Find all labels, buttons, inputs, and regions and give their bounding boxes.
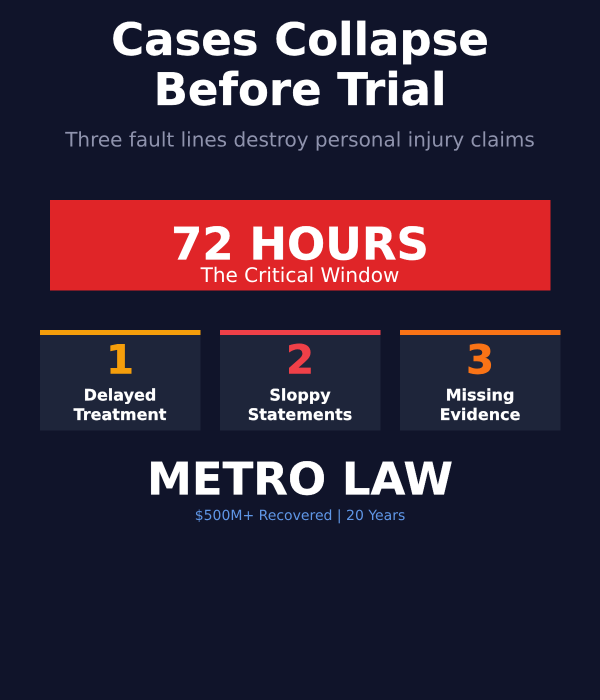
firm tagline: $500M+ Recovered | 20 Years <box>195 508 405 524</box>
panel: missing evidence: 3 <box>466 338 494 384</box>
banner: 72 hours <box>50 200 550 290</box>
panel: sloppy statements: 2 <box>286 338 314 384</box>
panel: delayed treatment: Delayed <box>84 386 156 404</box>
panel: delayed treatment: Treatment <box>74 405 167 424</box>
panel: sloppy statements <box>220 330 380 430</box>
subtitle: Three fault lines destroy personal injury claims <box>64 128 535 152</box>
firm name: METRO LAW <box>147 452 453 506</box>
panel: sloppy statements: Statements <box>248 405 352 424</box>
panel: missing evidence: Missing <box>446 386 514 404</box>
panel: sloppy statements: Sloppy <box>269 386 331 404</box>
panel: delayed treatment: 1 <box>106 338 134 384</box>
panel: missing evidence: Evidence <box>440 405 521 424</box>
title <box>111 13 489 116</box>
title: Cases Collapse <box>111 13 489 66</box>
panel: delayed treatment <box>40 330 200 430</box>
panel: missing evidence <box>400 330 560 430</box>
banner: 72 hours: The Critical Window <box>200 263 399 287</box>
title: Before Trial <box>154 63 446 116</box>
banner: 72 hours: 72 HOURS <box>171 218 429 270</box>
